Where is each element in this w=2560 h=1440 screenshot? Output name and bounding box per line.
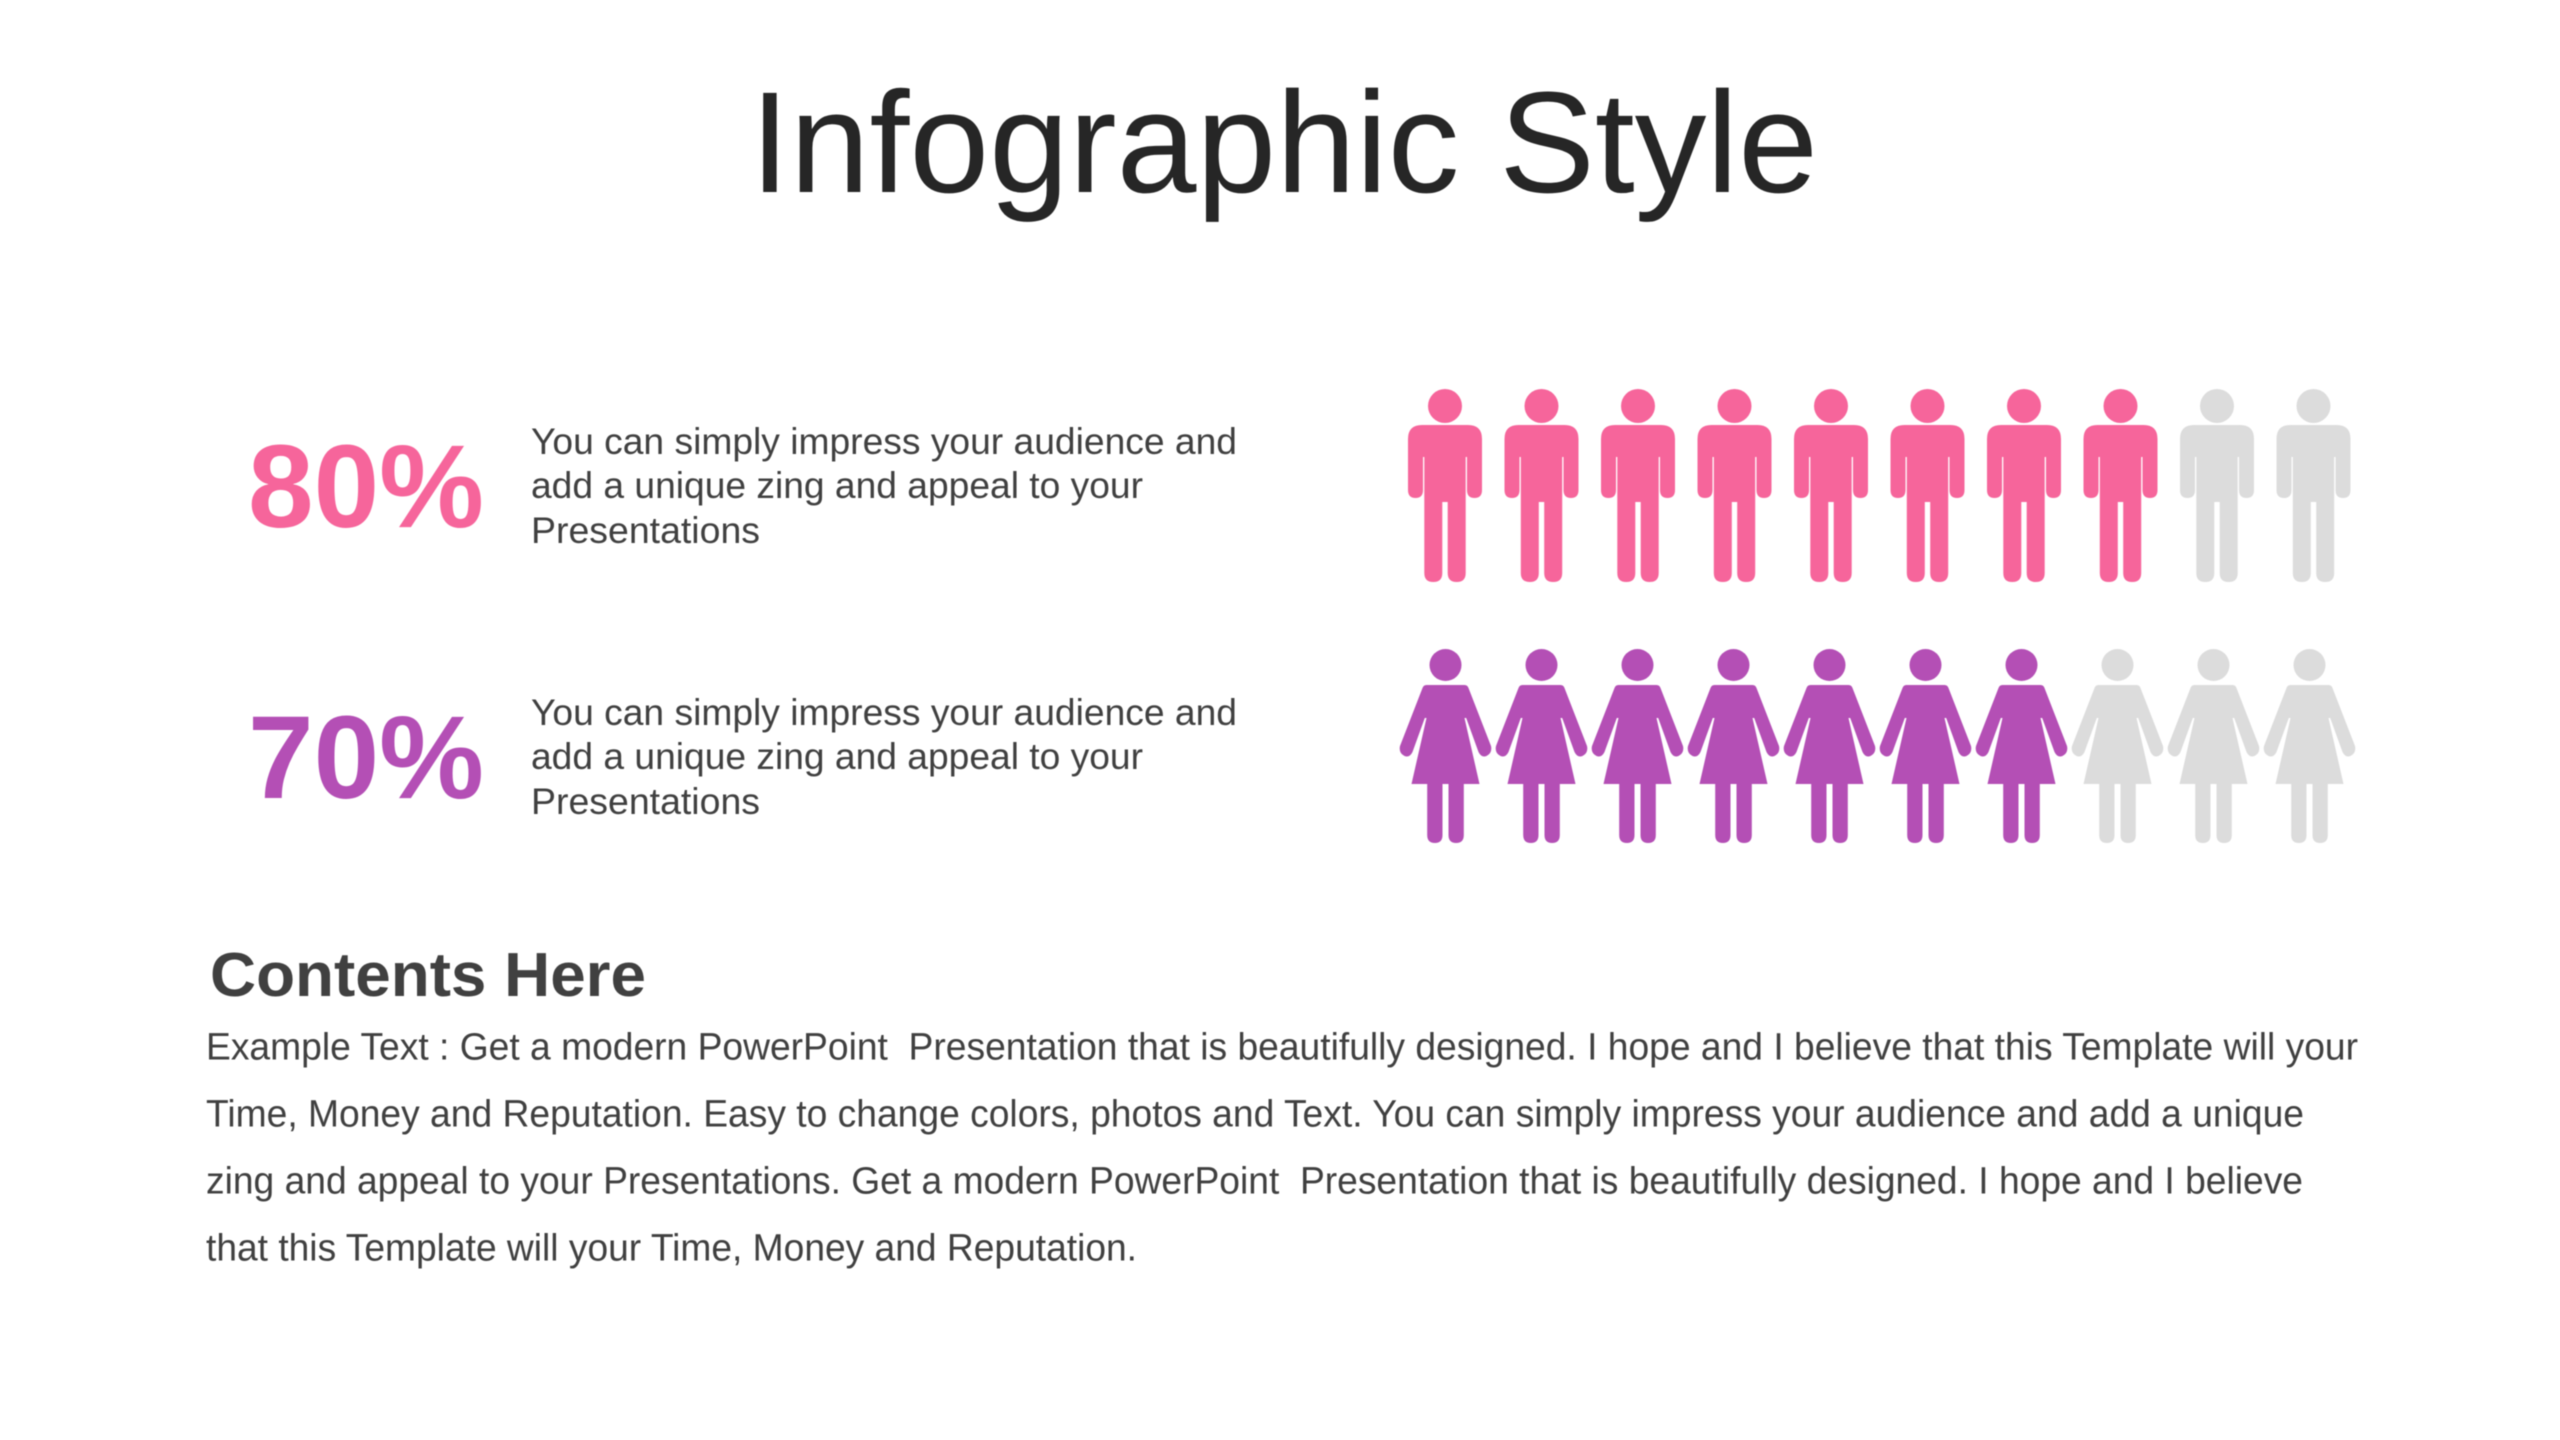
description: 80%: add a unique zing and appeal to your: [531, 465, 1143, 506]
description: 70%: You can simply impress your audience and: [531, 692, 1237, 733]
body paragraph: that this Template will your Time, Money and Reputation.: [206, 1228, 1137, 1270]
body paragraph: Example Text : Get a modern PowerPoint Presentation that is beautifully designed. I hope and I believe that this Template will your: [206, 1026, 2358, 1068]
description: 80%: Presentations: [531, 510, 760, 551]
description: 80%: [531, 421, 1237, 551]
stat row: 80%: [248, 421, 1237, 553]
stat row: 70%: [248, 692, 1237, 824]
description: 70%: add a unique zing and appeal to your: [531, 736, 1143, 777]
body paragraph: zing and appeal to your Presentations. Get a modern PowerPoint Presentation that is beautifully designed. I hope and I believe: [206, 1160, 2303, 1202]
percentage: 70%: 70%: [248, 692, 484, 824]
heading: contents: Contents Here: [210, 941, 646, 1010]
body paragraph: Time, Money and Reputation. Easy to change colors, photos and Text. You can simply impress your audience and add a unique: [206, 1094, 2304, 1136]
description: 70%: Presentations: [531, 781, 760, 822]
percentage: 80%: 80%: [248, 421, 484, 553]
title: Infographic Style: [750, 62, 1818, 223]
description: 70%: [531, 692, 1237, 822]
pictogram: men, 8 of 10 highlighted: [1408, 389, 2350, 582]
pictogram: women, 7 of 10 highlighted: [1400, 649, 2355, 843]
body paragraph: [206, 1026, 2358, 1270]
description: 80%: You can simply impress your audience and: [531, 421, 1237, 462]
